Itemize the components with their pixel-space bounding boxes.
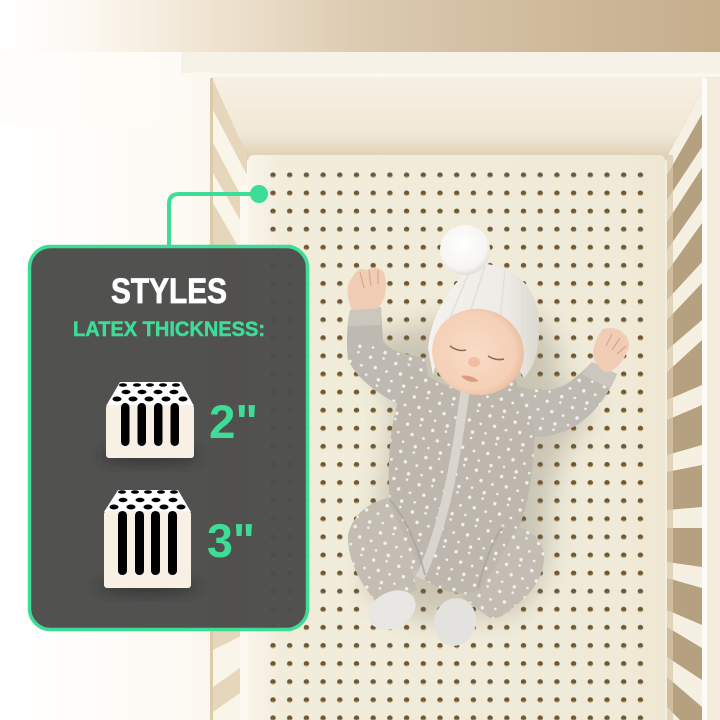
perforation holes: [264, 166, 649, 720]
crib frame: [181, 52, 720, 720]
connector dot: [250, 185, 268, 203]
label: 2 inch: 2": [209, 395, 258, 448]
right crib slats: [667, 80, 702, 720]
zipper: [420, 392, 465, 578]
right hand: [593, 328, 629, 372]
heading: STYLES: [111, 272, 227, 311]
right post: [702, 78, 720, 720]
right arm: [515, 362, 617, 437]
panel: styles: [30, 246, 308, 630]
left crib slats: [213, 80, 247, 720]
left leg: [348, 497, 428, 605]
hat: [428, 264, 539, 378]
panel background: [30, 246, 308, 630]
left hand: [348, 268, 386, 310]
label: 3 inch: 3": [207, 514, 255, 567]
icon: 2 inch latex block: [100, 382, 200, 466]
crib inner wall: [212, 76, 702, 160]
torso: [389, 365, 535, 593]
baby: [347, 225, 629, 651]
face: [424, 300, 532, 404]
left arm: [347, 307, 430, 405]
connector line: [169, 185, 268, 248]
right leg: [462, 526, 544, 618]
baby shadow: [360, 310, 589, 620]
latex mattress: [248, 155, 665, 720]
left post: [193, 72, 212, 720]
mouth: [461, 376, 479, 382]
nose: [468, 357, 480, 367]
top rail: [181, 52, 720, 73]
right sock: [429, 593, 481, 651]
left sock: [361, 582, 423, 638]
icon: 3 inch latex block: [98, 490, 198, 596]
pompom: [440, 225, 490, 275]
leg fold: [390, 500, 503, 588]
closed eyes: [450, 346, 504, 360]
subheading: LATEX THICKNESS:: [73, 318, 265, 341]
